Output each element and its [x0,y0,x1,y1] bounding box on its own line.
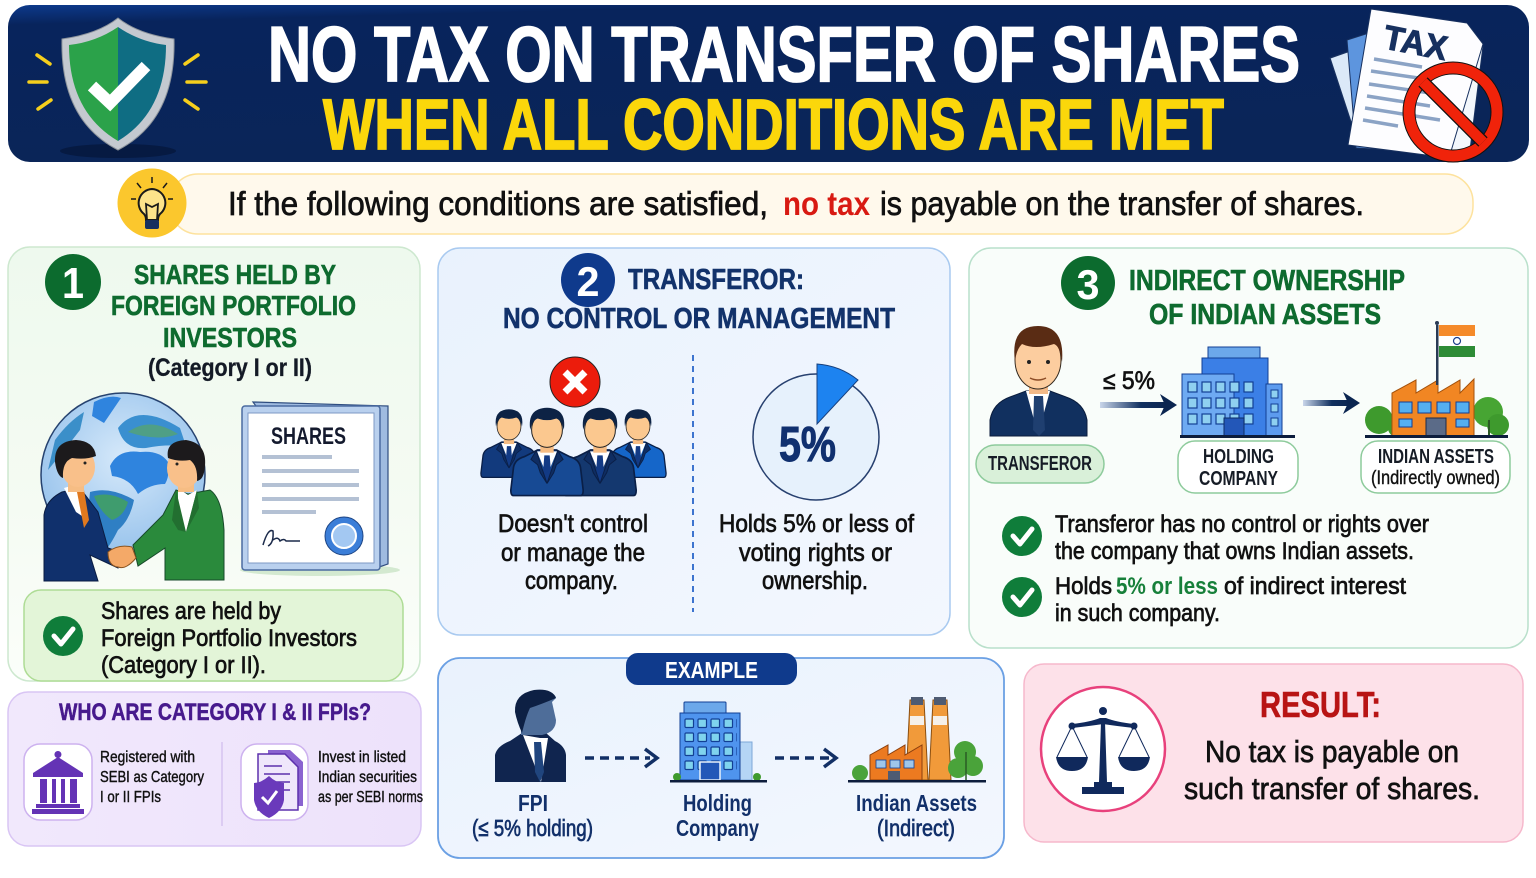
label: Indian assets: INDIAN ASSETS [1378,446,1494,468]
heading: shares held by foreign portfolio investors: INVESTORS [163,322,297,353]
number badge 2 [561,253,615,307]
result heading: RESULT: [1260,684,1381,725]
callout text: Foreign Portfolio Investors [101,625,357,652]
text: invest in listed securities: Invest in listed [318,749,406,766]
panel 2: transferor no control or management [438,248,950,635]
example labels: Holding [683,790,752,816]
intro banner [118,168,1473,238]
icon: tax document with prohibition sign [1330,9,1497,158]
chart: 5 percent pie [753,364,879,500]
text: holds 5 percent or less: in such company. [1055,600,1220,627]
icon: group of managers [481,408,666,496]
chart: 5 percent pie: 5% [779,418,836,472]
label: transferor: TRANSFEROR [988,453,1092,475]
icon: check 2 [1002,577,1042,617]
panel: example [438,653,1004,858]
number badge 3 [1061,256,1115,310]
heading: INDIRECT OWNERSHIP [1129,265,1405,297]
heading: TRANSFEROR: [628,264,804,296]
example labels: (Indirect) [877,815,955,841]
text: no control or rights: Transferor has no control or rights over [1055,511,1429,538]
label: holding company [1178,441,1298,493]
result text: No tax is payable on [1205,734,1459,769]
number badge 2: 2 [576,258,600,305]
icon: factory with chimneys [848,697,986,782]
example labels: FPI [518,790,548,816]
example labels: (≤ 5% holding) [472,815,593,841]
icon: FPI silhouette [495,690,566,782]
text: holds 5 percent or less: voting rights or [739,539,892,567]
icon: scales of justice [1041,687,1165,811]
panel: result [1024,664,1523,842]
text: holds 5 percent or less: Holds 5% or less of [719,510,914,538]
text: invest in listed securities: as per SEBI norms [318,789,423,806]
intro text: If the following conditions are satisfied, [228,185,768,222]
label: Indian assets [1361,441,1510,493]
label: transferor [976,445,1104,483]
callout text: Shares are held by [101,598,281,625]
text: holds 5 percent or less: of indirect interest [1224,573,1406,600]
text: holds 5 percent or less [719,510,914,595]
text: no control or rights [1055,511,1429,565]
text: holds 5 percent or less: Holds [1055,573,1112,600]
arrow: transferor to holding company [1100,394,1177,416]
text: registered with SEBI: I or II FPIs [100,789,161,806]
text: registered with SEBI [100,749,204,806]
text: holds 5 percent or less: 5% or less [1116,573,1218,600]
header banner [8,5,1529,165]
text: does not control: or manage the [501,539,645,567]
icon: factory with Indian flag [1365,321,1509,438]
icon: red cross [550,357,600,407]
title line 2: WHEN ALL CONDITIONS ARE MET [323,86,1224,165]
illustration: share certificate: SHARES [271,423,346,450]
example tab [626,653,797,685]
heading: WHO ARE CATEGORY I & II FPIs? [59,699,371,726]
left man in navy suit [44,440,120,581]
arrow: FPI to holding company [585,749,657,767]
heading [503,264,895,335]
number badge 1 [45,254,101,310]
heading: NO CONTROL OR MANAGEMENT [503,303,895,335]
text: invest in listed securities [318,749,423,806]
icon: holding company building [1180,347,1295,438]
label: holding company: COMPANY [1199,468,1279,490]
heading: OF INDIAN ASSETS [1149,299,1381,331]
text: holds 5 percent or less [1055,573,1406,627]
heading: shares held by foreign portfolio investors: FOREIGN PORTFOLIO [111,290,356,321]
icon: check 1 [1002,516,1042,556]
panel: who are category I and II FPIs [8,692,423,846]
text: registered with SEBI: Registered with [100,749,195,766]
illustration: globe and handshake [41,393,224,581]
text: does not control: company. [525,567,618,595]
icon: transferor person [990,326,1087,436]
example labels [472,790,977,841]
text: does not control [498,510,648,595]
text: does not control: Doesn't control [498,510,648,538]
callout: shares held by FPIs [24,590,403,681]
text: no control or rights: the company that owns Indian assets. [1055,538,1414,565]
callout text: (Category I or II). [101,652,266,679]
intro text: no tax [783,185,871,222]
handshake [108,546,136,568]
icon: tax document with prohibition sign: TAX [1380,19,1451,68]
panel 1: shares held by FPIs [8,247,420,681]
icon: light bulb [118,168,186,238]
intro text: is payable on the transfer of shares. [880,185,1364,222]
number badge 1: 1 [62,259,84,308]
label: Indian assets: (Indirectly owned) [1371,468,1500,489]
example labels: Indian Assets [856,790,977,816]
icon: document with shield [241,744,308,820]
icon: holding company building [670,702,767,782]
example labels: Company [676,815,759,841]
text: registered with SEBI: SEBI as Category [100,769,204,786]
heading: shares held by foreign portfolio investors: (Category I or II) [148,354,312,382]
icon: shield with checkmark [29,18,206,158]
heading: shares held by foreign portfolio investors [111,259,356,382]
result text: such transfer of shares. [1184,771,1480,806]
text: invest in listed securities: Indian securities [318,769,417,786]
arrow: holding company to Indian assets [775,749,836,767]
right man in green suit [133,440,224,580]
result text [1184,734,1480,806]
heading [1129,265,1405,331]
callout text [101,598,357,679]
illustration: share certificate [240,402,400,576]
text: holds 5 percent or less: ownership. [762,567,868,595]
number badge 3: 3 [1076,261,1100,308]
example tab: EXAMPLE [665,657,758,683]
label: holding company: HOLDING [1203,446,1274,468]
heading: shares held by foreign portfolio investors: SHARES HELD BY [134,259,336,290]
label: less than or equal to 5 percent: ≤ 5% [1103,367,1155,395]
icon: check [43,616,83,656]
panel 3: indirect ownership of Indian assets [969,248,1528,648]
arrow: holding company to Indian assets [1303,392,1360,414]
icon: institution [24,744,92,820]
